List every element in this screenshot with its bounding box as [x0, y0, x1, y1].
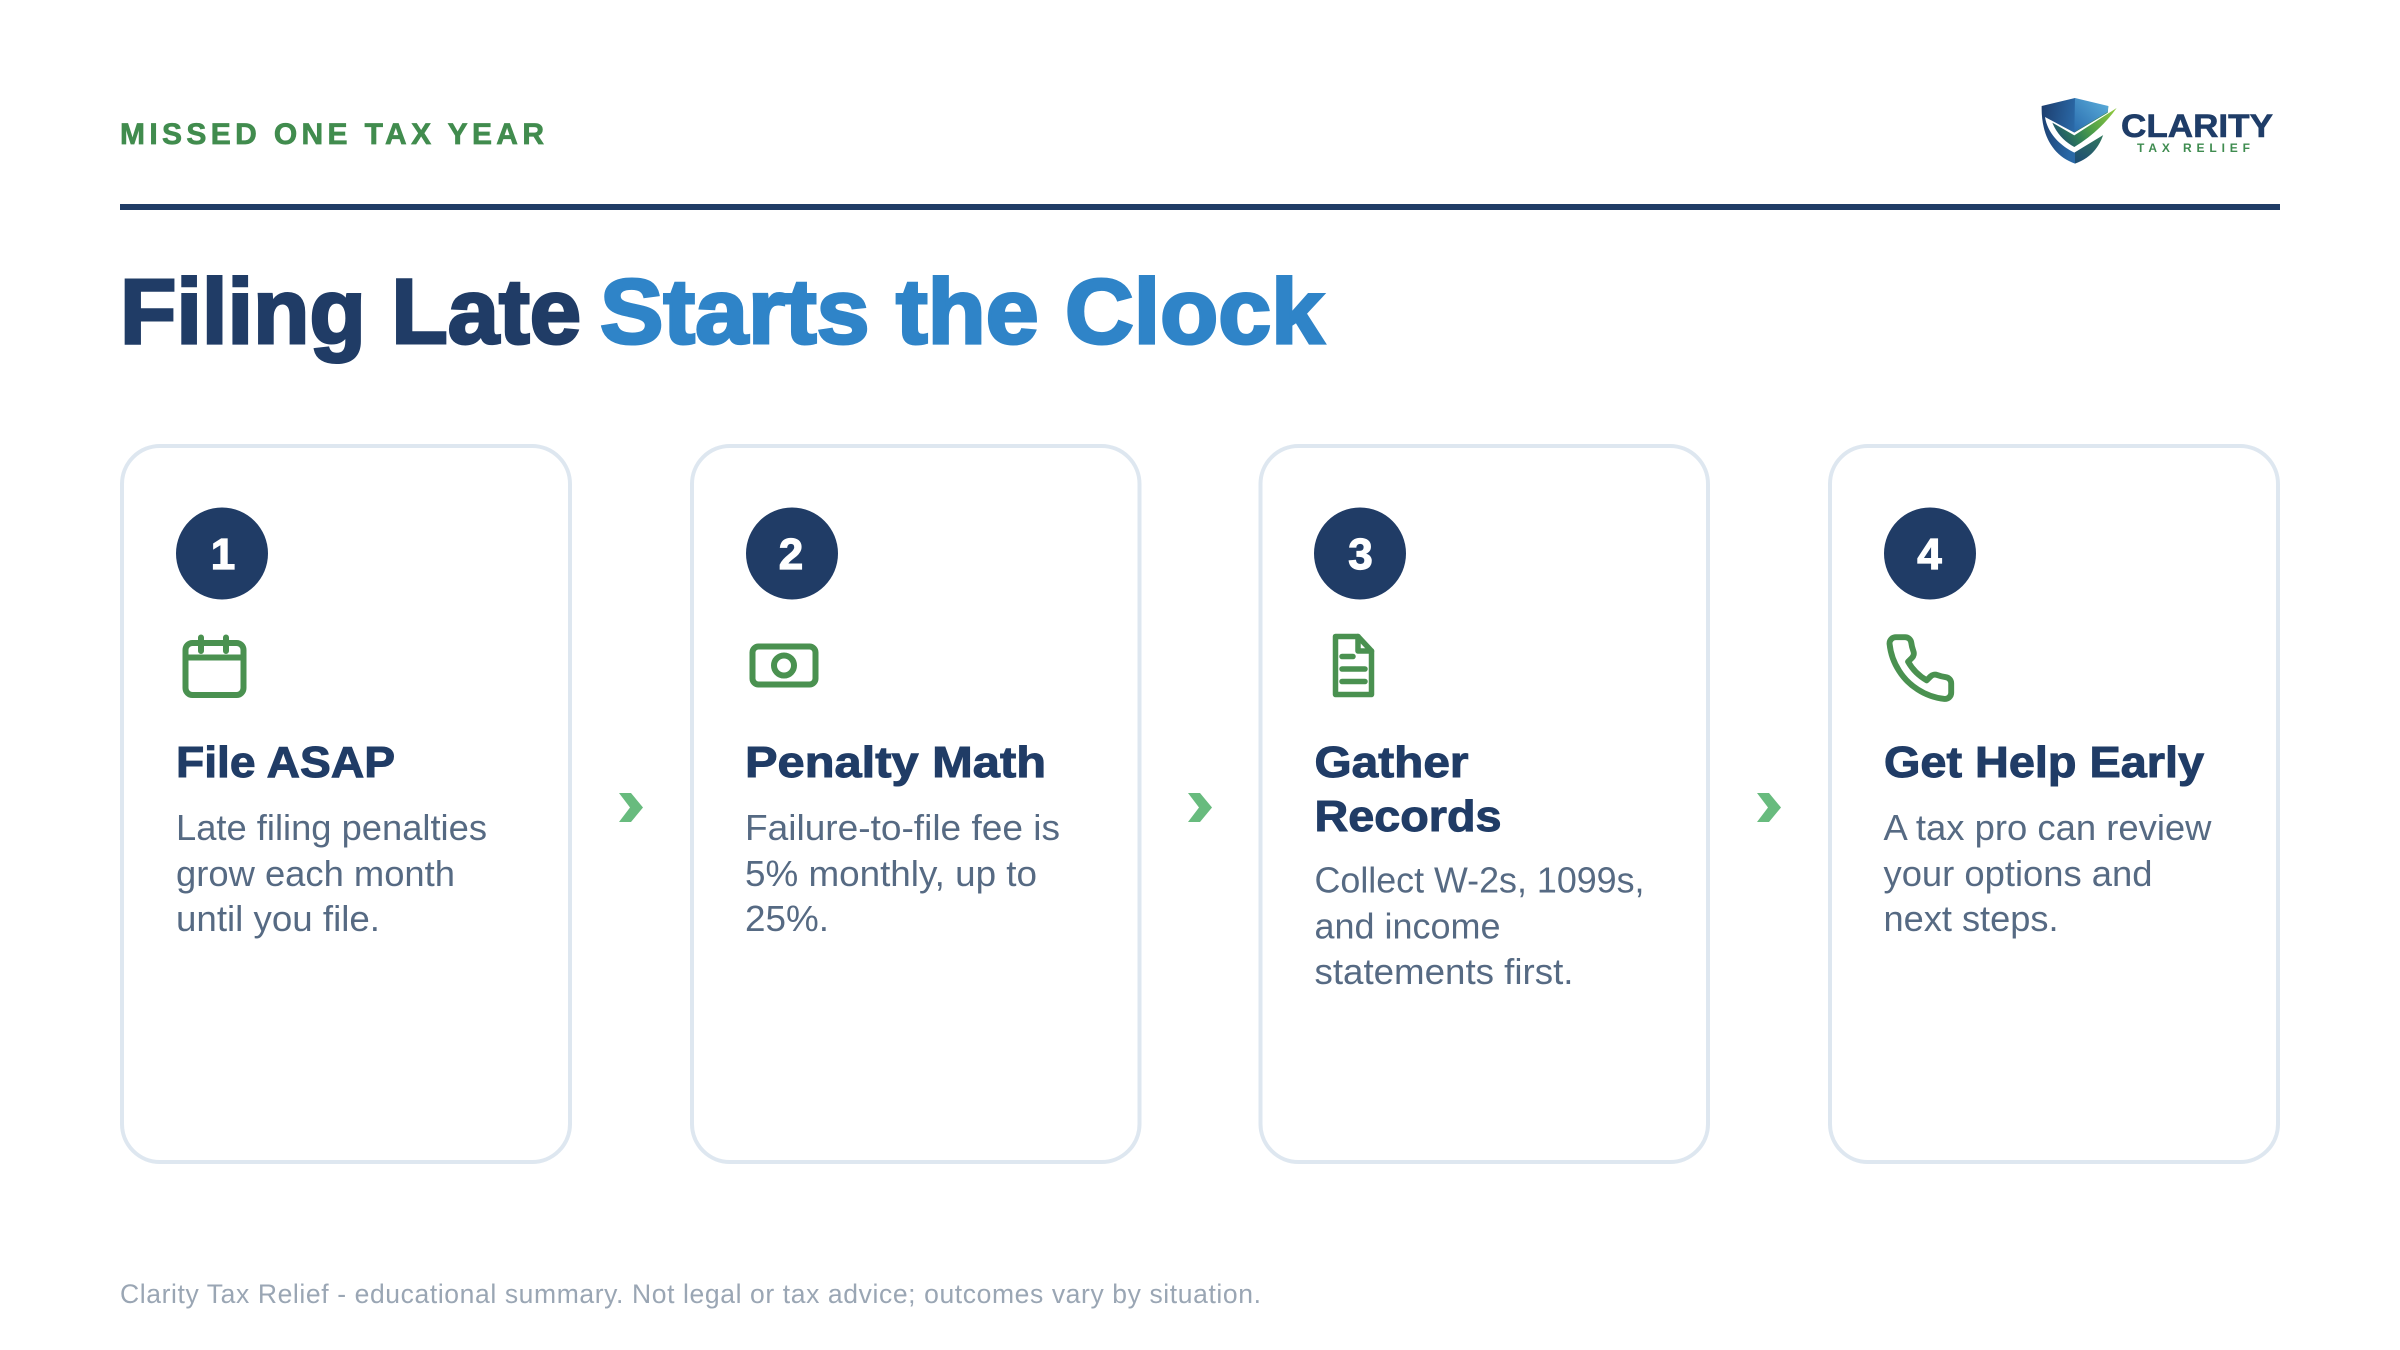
text: step 4 description: A tax pro can review [1884, 807, 2212, 848]
arrow 1 to 2 [619, 793, 643, 822]
header rule [120, 204, 2280, 210]
text: step 3 description [1314, 860, 1644, 992]
text: step 1 description: grow each month [176, 853, 455, 894]
panel: step 4 [1830, 446, 2278, 1162]
heading: Gather Records: Records [1314, 792, 1502, 841]
text: step 1 description [176, 807, 487, 939]
logo wordmark: CLARITY [2121, 108, 2273, 144]
step number 1 [176, 508, 268, 600]
title [120, 261, 1325, 363]
text: step 2 description: Failure-to-file fee is [745, 807, 1060, 848]
arrow 3 to 4 [1757, 793, 1781, 822]
heading: File ASAP: File ASAP [176, 738, 395, 787]
step number 2 [746, 508, 838, 600]
heading: Gather Records [1314, 738, 1502, 841]
step number 3 [1314, 508, 1406, 600]
text: step 1 description: until you file. [176, 898, 380, 939]
text: step 3 description: Collect W-2s, 1099s, [1314, 860, 1644, 900]
text: step 2 description [745, 807, 1060, 939]
icon: money bill [752, 646, 816, 684]
text: step 2 description: 25%. [745, 898, 829, 939]
logo: Clarity Tax Relief [2042, 98, 2273, 164]
text: step 3 description: statements first. [1314, 951, 1574, 992]
text: step 4 description [1884, 807, 2212, 939]
arrow 2 to 3 [1188, 793, 1212, 822]
panel: step 1 [122, 446, 570, 1162]
heading: Gather Records: Gather [1314, 738, 1468, 787]
icon: document [1336, 636, 1372, 694]
icon: calendar [186, 638, 244, 695]
footer disclaimer: Clarity Tax Relief - educational summary. Not legal or tax advice; outcomes vary by situation. [120, 1279, 1261, 1309]
title: Filing Late [120, 261, 581, 363]
icon: shield with check mark [2042, 98, 2117, 164]
step number 4 [1884, 508, 1976, 600]
text: step 1 description: Late filing penalties [176, 807, 487, 848]
text: step 3 description: and income [1314, 906, 1500, 946]
text: step 4 description: your options and [1884, 853, 2152, 894]
text: step 2 description: 5% monthly, up to [745, 853, 1037, 894]
heading: Penalty Math: Penalty Math [745, 738, 1046, 787]
step number 4: 4 [1917, 530, 1942, 579]
logo tagline: TAX RELIEF [2137, 141, 2250, 155]
icon: phone [1890, 637, 1951, 699]
heading: Get Help Early: Get Help Early [1884, 738, 2205, 787]
title: Starts the Clock [600, 261, 1325, 363]
eyebrow label: MISSED ONE TAX YEAR [120, 118, 544, 151]
text: step 4 description: next steps. [1884, 898, 2058, 939]
step number 1: 1 [211, 530, 235, 579]
panel: step 2 [692, 446, 1140, 1162]
panel: step 3 [1260, 446, 1708, 1162]
step number 3: 3 [1348, 530, 1373, 579]
step number 2: 2 [779, 530, 803, 579]
